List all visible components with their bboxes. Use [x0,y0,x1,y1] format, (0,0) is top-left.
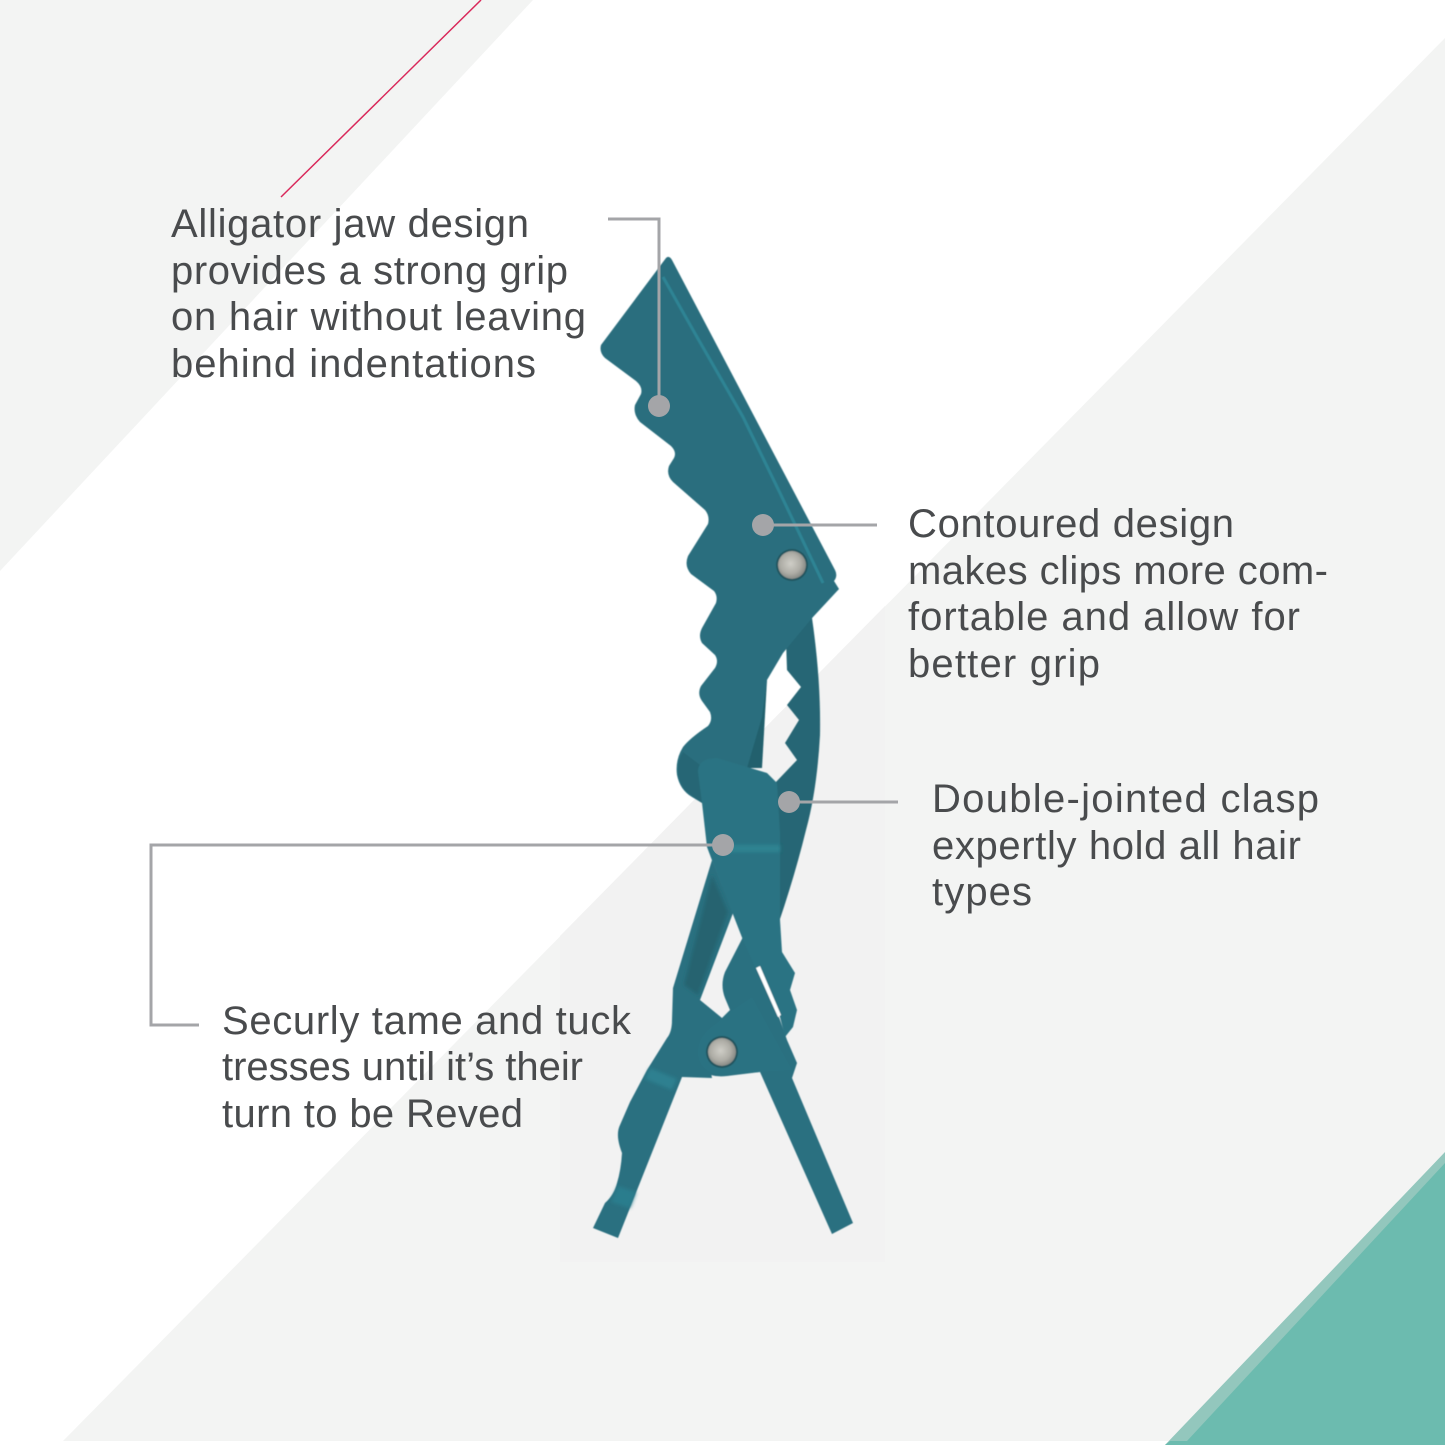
text block: double-jointed clasp: Double-jointed clasp [932,777,1319,821]
text block: contoured design: makes clips more com- [908,549,1328,593]
callout leader: jaw design [608,219,670,417]
background: top-left grey triangle [0,0,533,571]
text block: alligator jaw design [171,202,586,386]
text block: contoured design: better grip [908,642,1100,686]
clip: left tip highlight [611,1186,636,1208]
clip: dark strip behind upper jaw [745,680,767,768]
text block: alligator jaw design: behind indentations [171,342,536,386]
clip: lever highlight band [716,845,780,852]
clip: curved back arm with teeth [765,618,820,925]
text block: double-jointed clasp [932,777,1319,914]
callout leader: contoured design [752,514,877,536]
text block: double-jointed clasp: types [932,870,1032,914]
text block: double-jointed clasp: expertly hold all hair [932,824,1301,868]
clip: upper jaw [600,257,839,803]
clip: upper rivet [776,549,808,581]
clip: pivot plate [698,997,792,1075]
text block: alligator jaw design: provides a strong grip [171,249,568,293]
text block: contoured design [908,502,1328,686]
accent: corner teal triangle [1165,1152,1445,1445]
clip: front lever [698,758,797,1037]
text block: securely tame and tuck: Securly tame and tuck [222,999,632,1043]
clip: left arm highlight band [645,1068,677,1090]
accent: red diagonal line [281,0,481,197]
hair clip illustration [593,257,853,1238]
callout leader: double-jointed clasp [778,791,898,813]
text block: alligator jaw design: on hair without leaving [171,295,586,339]
clip: right lower arm [696,937,853,1234]
callout leader: tame and tuck [151,834,734,1025]
clip: white slit [756,966,781,1017]
text block: securely tame and tuck: tresses until it’s their [222,1045,583,1089]
text block: alligator jaw design: Alligator jaw design [171,202,529,246]
text block: contoured design: fortable and allow for [908,595,1300,639]
clip: lower rivet [706,1036,738,1068]
background: product photo backdrop [560,606,885,1262]
clip: left lower arm [593,860,733,1238]
clip: upper jaw ridge highlight [663,277,823,583]
clip: left arm shading [684,875,728,995]
clip: knob shading [678,752,702,803]
text block: securely tame and tuck [222,999,632,1136]
text block: securely tame and tuck: turn to be Reved [222,1092,523,1136]
text block: contoured design: Contoured design [908,502,1234,546]
